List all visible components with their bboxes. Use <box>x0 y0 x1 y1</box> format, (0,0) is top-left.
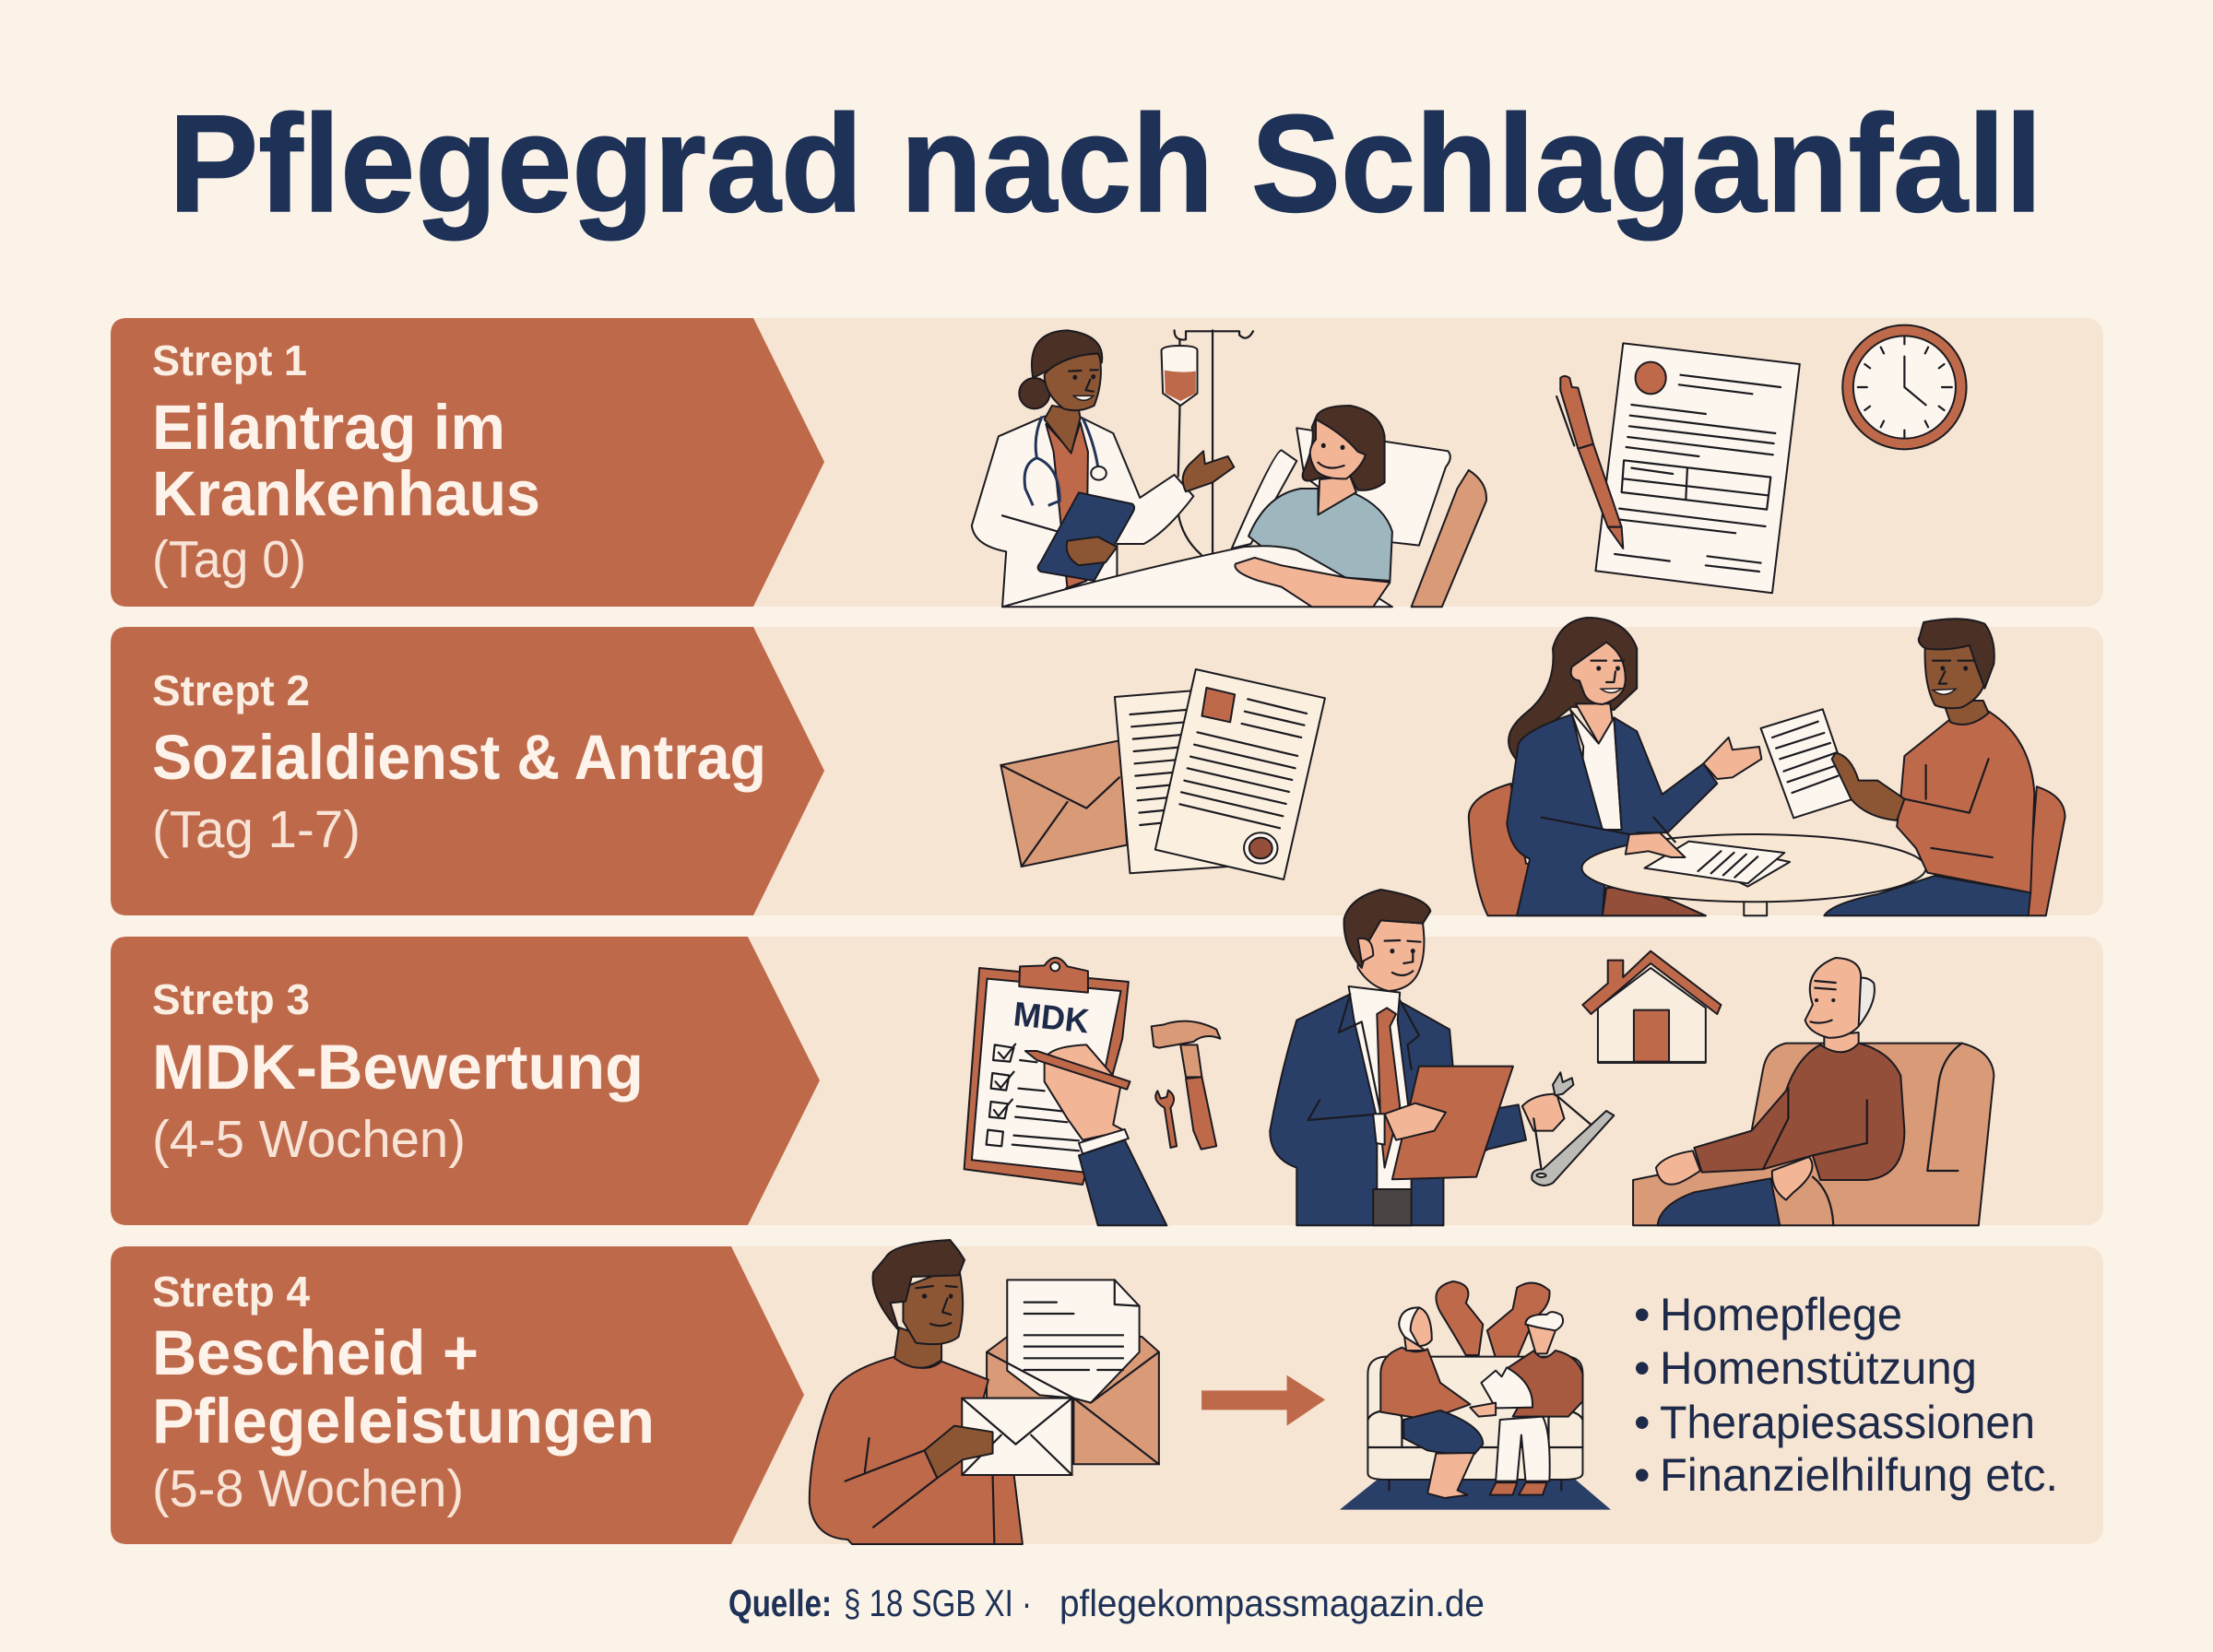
list: care services: • <box>1634 1342 1651 1394</box>
step text: Eilantrag im <box>152 392 505 463</box>
chevron banner <box>111 318 824 607</box>
illustration: social worker and client at table <box>1469 618 2065 915</box>
icon: wall clock <box>1842 325 1967 449</box>
illustration: envelope and documents <box>1000 669 1325 879</box>
title: Pflegegrad nach Schlaganfall <box>169 86 2042 241</box>
illustration: assessor with clipboard <box>1270 890 1564 1225</box>
step text <box>152 975 644 1169</box>
illustration: doctor and patient in hospital bed <box>972 330 1486 607</box>
step text: (Tag 1-7) <box>152 800 361 859</box>
step text: Sozialdienst & Antrag <box>152 722 766 793</box>
footer source line: pflegekompassmagazin.de <box>1059 1582 1485 1624</box>
illustration: person opening letter <box>810 1240 1159 1544</box>
MDK label: MDK <box>1012 995 1091 1041</box>
illustration: form and pen <box>1556 343 1800 593</box>
icon: hammer and wrench <box>1152 1021 1220 1150</box>
step text <box>152 336 540 589</box>
list: care services: Finanzielhilfung etc. <box>1660 1449 2058 1501</box>
list: care services: Homenstützung <box>1660 1342 1977 1394</box>
list: care services <box>1634 1289 2058 1501</box>
panel: step 1 <box>111 318 2103 607</box>
list: care services: • <box>1634 1397 1651 1448</box>
step text: Stretp 4 <box>152 1268 310 1316</box>
arrow <box>1201 1375 1325 1426</box>
footer source line: § 18 SGB XI · <box>844 1582 1032 1624</box>
panel: step 2 <box>111 618 2103 915</box>
step text: (4-5 Wochen) <box>152 1110 466 1169</box>
step text: Krankenhaus <box>152 458 540 529</box>
list: care services: Therapiesassionen <box>1660 1397 2035 1448</box>
panel: step 4 <box>111 1240 2103 1544</box>
panel background <box>111 1246 2103 1544</box>
step text: (5-8 Wochen) <box>152 1459 464 1518</box>
icon: grey wrench tool <box>1532 1072 1614 1186</box>
step text <box>152 667 766 859</box>
illustration: MDK clipboard with checklist <box>964 958 1166 1225</box>
list: care services: Homepflege <box>1660 1289 1902 1340</box>
panel: step 3 <box>111 890 2103 1225</box>
icon: house <box>1582 951 1721 1063</box>
chevron banner <box>111 937 820 1225</box>
step text: Bescheid + <box>152 1317 479 1388</box>
panel background <box>111 627 2103 915</box>
footer source line <box>728 1582 1485 1624</box>
list: care services: • <box>1634 1289 1651 1340</box>
step text: Pflegeleistungen <box>152 1386 655 1457</box>
step text: Strept 2 <box>152 667 310 714</box>
step text: Strept 1 <box>152 336 307 384</box>
list: care services: • <box>1634 1449 1651 1501</box>
panel background <box>111 318 2103 607</box>
illustration: elderly couple on sofa with rug and plants <box>1340 1281 1611 1510</box>
illustration: elderly man in armchair <box>1633 958 1994 1225</box>
step text <box>152 1268 655 1518</box>
step text: MDK-Bewertung <box>152 1032 644 1103</box>
chevron banner <box>111 1246 804 1544</box>
step text: Stretp 3 <box>152 975 310 1023</box>
panel background <box>111 937 2103 1225</box>
footer source line: Quelle: <box>728 1582 832 1624</box>
chevron banner <box>111 627 824 915</box>
step text: (Tag 0) <box>152 530 306 589</box>
